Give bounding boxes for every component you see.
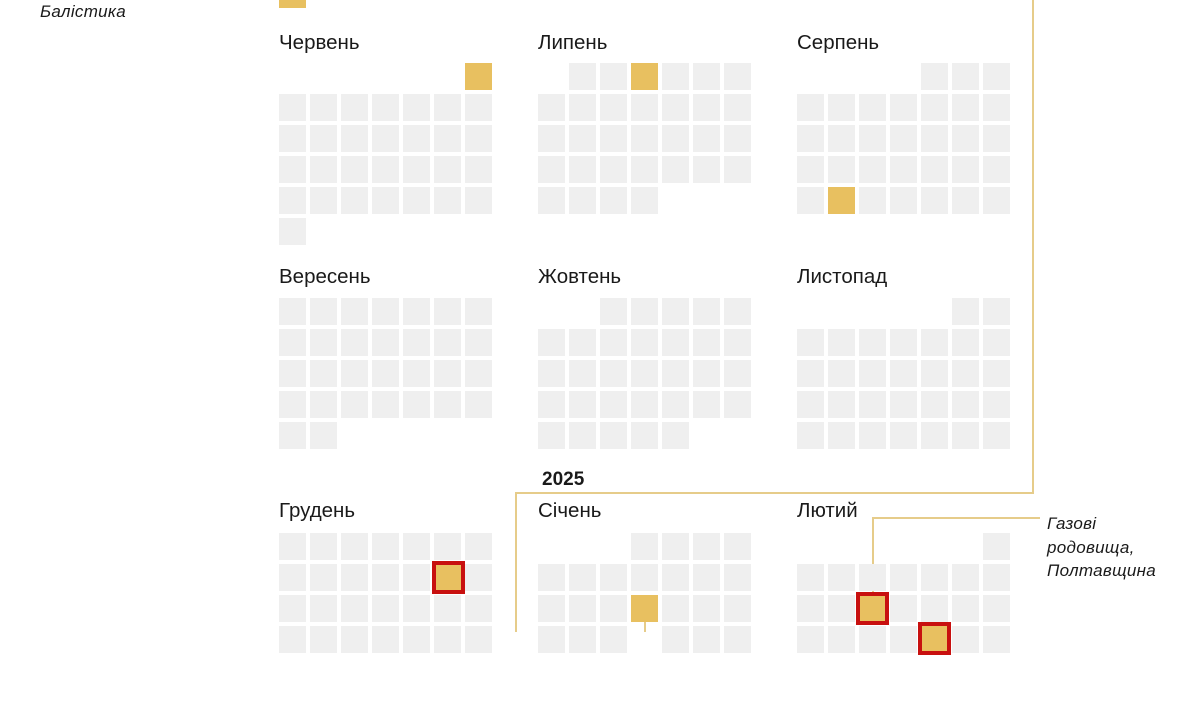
top yellow cell	[279, 0, 306, 8]
calendar: September	[279, 298, 492, 449]
heading: Вересень: Вересень	[279, 265, 371, 288]
calendar: November	[797, 298, 1010, 449]
heading: Червень: Червень	[279, 31, 360, 54]
callout: Газові родовища, Полтавщина: Газові	[1047, 514, 1096, 533]
calendar: January	[538, 533, 751, 653]
heading: Січень: Січень	[538, 499, 601, 522]
calendar: December	[279, 533, 492, 653]
heading: Серпень: Серпень	[797, 31, 879, 54]
year heading: 2025: 2025	[542, 469, 584, 490]
calendar: October	[538, 298, 751, 449]
callout: Газові родовища, Полтавщина: родовища,	[1047, 538, 1135, 556]
heading: Грудень: Грудень	[279, 499, 355, 522]
callout: Газові родовища, Полтавщина: Полтавщина	[1047, 561, 1156, 580]
heading: Лютий: Лютий	[797, 499, 858, 522]
heading: Листопад: Листопад	[797, 265, 887, 288]
calendar: June	[279, 63, 492, 245]
heading: Жовтень: Жовтень	[538, 265, 621, 288]
label: Балістика: Балістика	[40, 2, 126, 21]
calendar: August	[797, 63, 1010, 214]
heading: Липень: Липень	[538, 31, 607, 54]
calendar: February	[797, 533, 1010, 655]
calendar: July	[538, 63, 751, 214]
callout: Газові родовища, Полтавщина	[1046, 514, 1156, 580]
